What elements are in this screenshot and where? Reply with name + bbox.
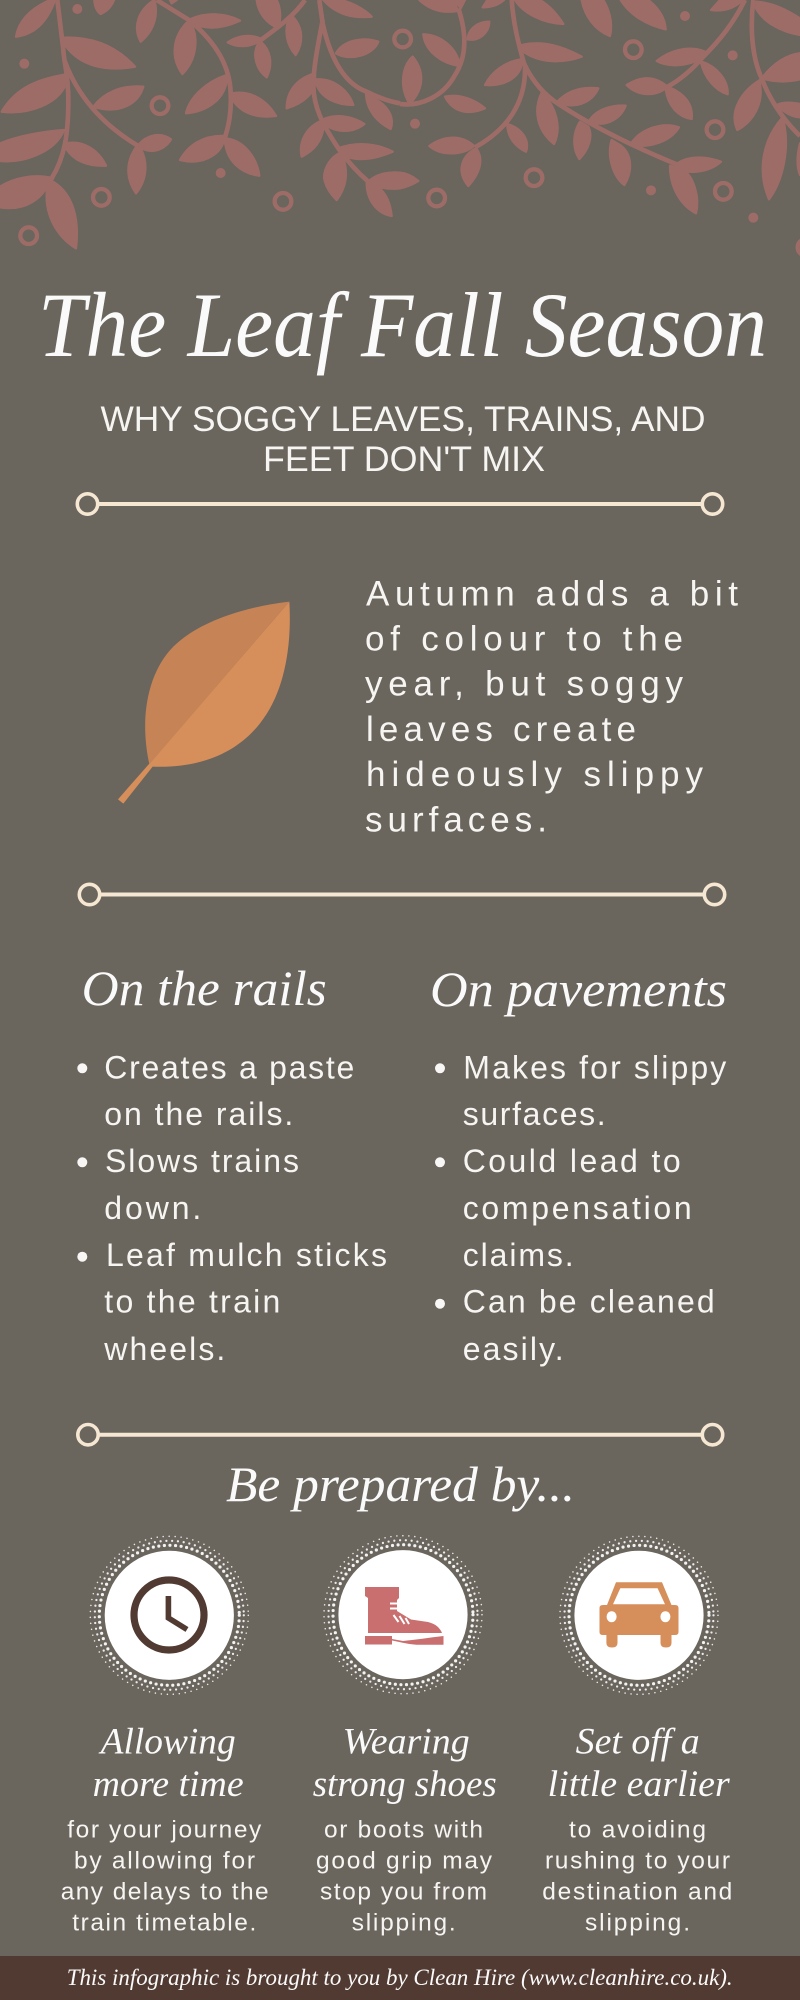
tip: set off a little earlier: destination and <box>542 1878 732 1905</box>
foliage decoration, left half <box>0 0 400 248</box>
icon: orange leaf <box>118 602 290 804</box>
tip: wearing strong shoes: or boots with <box>324 1817 483 1844</box>
intro text <box>365 574 738 840</box>
bullet list: pavements: surfaces. <box>463 1096 606 1132</box>
intro text: leaves create <box>366 710 636 749</box>
divider 2 <box>79 884 725 905</box>
intro text: of colour to the <box>365 620 683 659</box>
bullet list: rails: down. <box>104 1190 201 1226</box>
tip: allowing more time: train timetable. <box>72 1909 256 1936</box>
footer band: This infographic is brought to you by Clean Hire (www.cleanhire.co.uk). <box>67 1965 733 1990</box>
intro text: surfaces. <box>365 801 547 840</box>
bullet list: rails: Creates a paste <box>104 1049 354 1085</box>
heading: on pavements: On pavements <box>430 961 727 1017</box>
intro text: Autumn adds a bit <box>366 574 738 613</box>
panel: on the rails <box>77 960 387 1367</box>
tip: set off a little earlier: slipping. <box>585 1909 690 1936</box>
tip: set off a little earlier: rushing to your <box>545 1848 730 1875</box>
bullet list: rails: on the rails. <box>104 1096 293 1132</box>
heading: be prepared by: Be prepared by... <box>226 1456 575 1512</box>
bullet list: rails: Leaf mulch sticks <box>106 1237 387 1273</box>
bullet list: rails: wheels. <box>103 1331 225 1367</box>
bullet list: pavements: claims. <box>463 1237 574 1273</box>
footer band <box>0 1956 800 2000</box>
title: The Leaf Fall Season <box>38 274 767 376</box>
tip: allowing more time: by allowing for <box>74 1848 255 1875</box>
tip: wearing strong shoes: good grip may <box>316 1848 493 1875</box>
tip: allowing more time: for your journey <box>67 1817 262 1844</box>
tip: allowing more time: any delays to the <box>61 1878 269 1905</box>
intro text: hideously slippy <box>366 755 704 794</box>
tip: wearing strong shoes: strong shoes <box>313 1764 497 1805</box>
tip: wearing strong shoes: Wearing <box>343 1721 470 1762</box>
tip: set off a little earlier: Set off a <box>576 1721 700 1762</box>
icon badge: car <box>560 1536 718 1694</box>
icon badge: clock <box>90 1536 248 1694</box>
tip: set off a little earlier: to avoiding <box>569 1817 706 1844</box>
subtitle <box>100 400 706 479</box>
bullet list: rails <box>77 1049 387 1367</box>
bullet list: pavements <box>435 1049 726 1367</box>
tip: allowing more time: Allowing <box>98 1721 236 1762</box>
tip: wearing strong shoes <box>313 1721 497 1936</box>
divider 3 <box>78 1424 723 1445</box>
tip: set off a little earlier <box>542 1721 732 1936</box>
bullet list: pavements: Can be cleaned <box>463 1284 715 1320</box>
tip: set off a little earlier: little earlier <box>548 1764 730 1805</box>
bullet list: rails: to the train <box>104 1284 280 1320</box>
subtitle: FEET DON'T MIX <box>263 440 545 479</box>
icon badge: boot <box>324 1536 482 1694</box>
bullet list: pavements: compensation <box>463 1190 692 1226</box>
tip: wearing strong shoes: stop you from <box>320 1878 487 1905</box>
subtitle: WHY SOGGY LEAVES, TRAINS, AND <box>100 400 706 439</box>
tip: wearing strong shoes: slipping. <box>352 1909 456 1936</box>
divider 1 <box>77 494 723 514</box>
bullet list: pavements: easily. <box>463 1331 564 1367</box>
bullet list: rails: Slows trains <box>105 1143 299 1179</box>
panel: on pavements <box>430 961 727 1367</box>
tip: allowing more time <box>61 1721 269 1936</box>
heading: on the rails: On the rails <box>82 960 327 1016</box>
tip: allowing more time: more time <box>93 1764 244 1805</box>
intro text: year, but soggy <box>365 665 684 704</box>
foliage decoration, right half <box>394 0 800 256</box>
bullet list: pavements: Could lead to <box>463 1143 681 1179</box>
bullet list: pavements: Makes for slippy <box>463 1049 726 1085</box>
